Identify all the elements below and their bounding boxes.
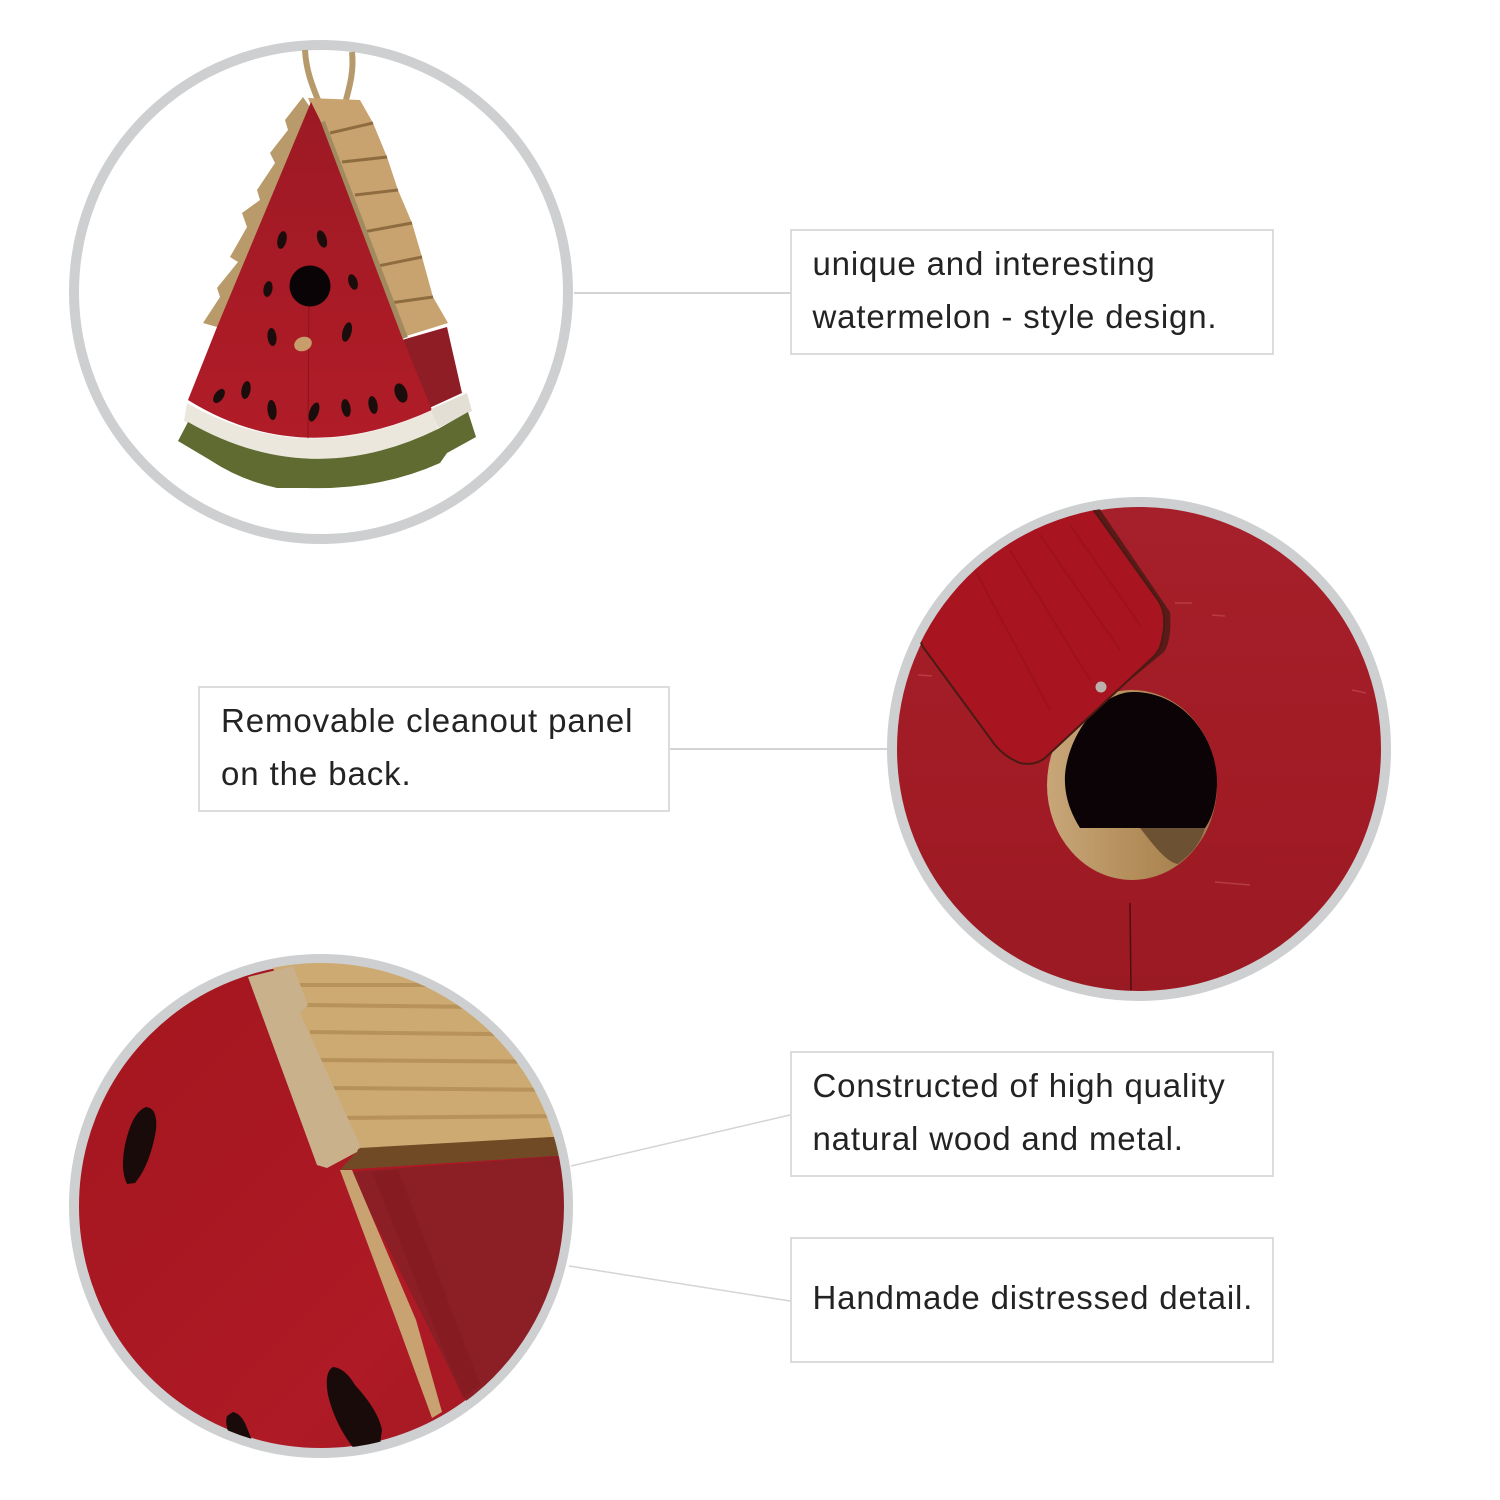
panel shadow <box>1094 509 1170 682</box>
distressed edge <box>340 1170 442 1418</box>
wood roof <box>270 960 570 1150</box>
eave underside <box>340 1136 570 1170</box>
right roof shingles <box>308 98 448 338</box>
callout: design: unique and interesting <box>812 245 1156 282</box>
cleanout flap <box>920 510 1166 765</box>
seeds <box>211 229 410 423</box>
entry hole <box>290 266 330 306</box>
photo circle: wood detail <box>74 959 575 1453</box>
hole rim <box>1047 690 1217 880</box>
connector: distressed <box>569 1266 790 1301</box>
wood inside hole <box>1140 828 1205 864</box>
left roof shingles <box>203 97 312 327</box>
connector: top <box>574 292 790 294</box>
callout: design <box>790 229 1274 355</box>
callout: distressed detail: Handmade distressed detail. <box>812 1279 1253 1316</box>
connector: materials <box>571 1115 790 1166</box>
callout: materials <box>790 1051 1274 1177</box>
cut edge <box>248 966 360 1168</box>
callout: distressed detail <box>790 1237 1274 1363</box>
callout: cleanout panel: on the back. <box>221 755 412 792</box>
nail <box>1096 682 1106 692</box>
roof grain <box>297 985 570 1118</box>
callout: cleanout panel: Removable cleanout panel <box>221 702 633 739</box>
photo circle: watermelon birdhouse <box>74 45 568 539</box>
rope <box>305 50 358 118</box>
seeds <box>123 1107 156 1184</box>
callout: cleanout panel <box>198 686 670 812</box>
photo circle: cleanout panel <box>880 480 1386 996</box>
green rind <box>178 412 476 488</box>
side wall <box>353 1156 564 1401</box>
white rind <box>184 403 438 459</box>
callout: materials: Constructed of high quality <box>812 1067 1226 1104</box>
front face <box>188 102 432 438</box>
callout: materials: natural wood and metal. <box>812 1120 1184 1157</box>
flap grain <box>975 525 1140 710</box>
perch <box>292 334 314 354</box>
connector: middle <box>670 748 887 750</box>
side panel <box>395 327 462 410</box>
callout: design: watermelon - style design. <box>812 298 1217 335</box>
hole interior <box>1065 692 1217 828</box>
crack <box>1130 903 1131 990</box>
